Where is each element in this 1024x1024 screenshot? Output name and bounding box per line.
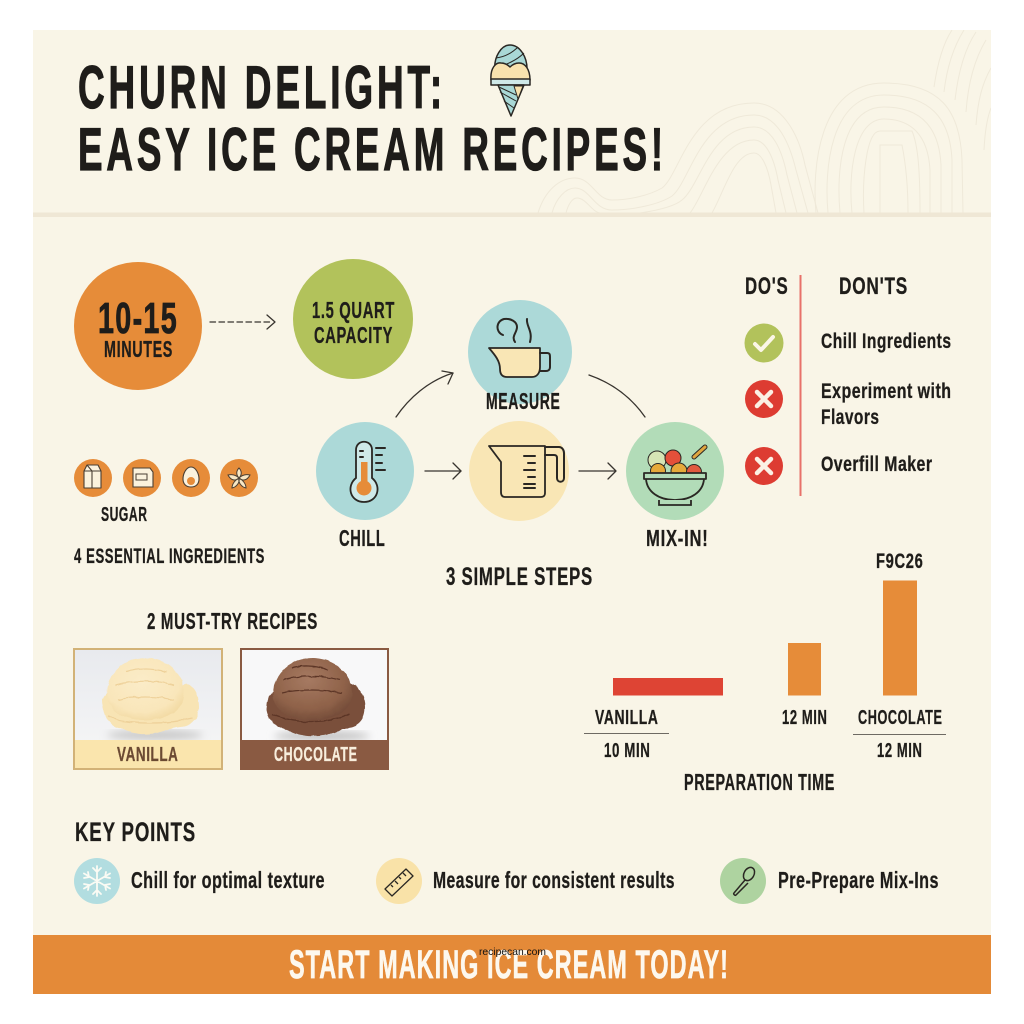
key point: mix-ins — [720, 858, 939, 904]
icon: egg — [172, 459, 210, 497]
footer banner: START MAKING ICE CREAM TODAY! — [289, 943, 729, 987]
footer banner — [33, 935, 991, 994]
key point: mix-ins: Pre-Prepare Mix-Ins — [778, 867, 939, 893]
panel: do's and don'ts: DO'S — [745, 273, 788, 300]
labels: chocolate — [853, 706, 946, 762]
icon: cross — [745, 447, 783, 485]
divider band — [33, 212, 991, 217]
arrow: dashed to capacity — [210, 315, 275, 329]
card: chocolate — [241, 649, 389, 769]
step: mix-in bowl — [626, 422, 724, 551]
axis title: PREPARATION TIME — [684, 769, 835, 795]
panel: do's and don'ts: Chill Ingredients — [821, 330, 952, 353]
card: vanilla — [74, 649, 222, 769]
key point: measure — [376, 858, 675, 904]
step: measure: MEASURE — [486, 388, 560, 414]
heading: 2 must-try recipes: 2 MUST-TRY RECIPES — [147, 608, 318, 634]
icon: sugar bag — [123, 459, 161, 497]
title — [78, 54, 667, 183]
header contour pattern — [538, 30, 991, 213]
card: vanilla: VANILLA — [117, 744, 178, 766]
icon: check — [744, 324, 784, 362]
key point: measure: Measure for consistent results — [433, 867, 675, 893]
icon: vanilla flower — [220, 459, 258, 497]
bar: vanilla — [613, 678, 723, 696]
panel: do's and don'ts: DON'TS — [839, 273, 908, 300]
heading: key points: KEY POINTS — [75, 817, 196, 847]
label: 12 min: 12 MIN — [782, 707, 828, 729]
labels: vanilla — [584, 706, 669, 762]
step: measuring cup — [469, 421, 569, 521]
arrow: cup to mix-in — [579, 463, 616, 479]
step: measure — [468, 300, 572, 414]
stat: 1.5 quart capacity — [293, 259, 413, 379]
arrow: chill to cup — [425, 463, 461, 479]
labels: chocolate: CHOCOLATE — [858, 706, 942, 729]
panel: do's and don'ts: Overfill Maker — [821, 453, 932, 476]
arrow: chill to measure — [396, 371, 453, 417]
chart: preparation time — [584, 550, 946, 795]
heading: 4 essential ingredients: 4 ESSENTIAL INGREDIENTS — [74, 545, 265, 568]
stat: 10-15 minutes — [74, 262, 202, 390]
stat: 1.5 quart capacity: CAPACITY — [314, 322, 393, 348]
label: sugar: SUGAR — [101, 504, 148, 526]
bar: middle — [788, 643, 821, 696]
labels: vanilla: 10 MIN — [604, 740, 650, 762]
label: F9C26: F9C26 — [876, 550, 924, 573]
icon: ice cream cone — [491, 45, 530, 116]
panel: do's and don'ts — [744, 273, 952, 496]
bar: chocolate — [883, 580, 917, 696]
ingredients group — [74, 459, 258, 497]
icon: milk carton — [74, 459, 112, 497]
heading: 3 simple steps: 3 SIMPLE STEPS — [446, 563, 593, 591]
panel: do's and don'ts: Experiment with — [821, 380, 952, 403]
labels: vanilla: VANILLA — [595, 706, 658, 729]
panel: do's and don'ts: Flavors — [821, 406, 880, 429]
title: EASY ICE CREAM RECIPES! — [78, 116, 667, 183]
labels: chocolate: 12 MIN — [877, 740, 922, 762]
card: chocolate: CHOCOLATE — [274, 744, 358, 766]
step: mix-in bowl: MIX-IN! — [646, 525, 708, 551]
icon: cross — [745, 380, 783, 418]
step: chill: CHILL — [339, 525, 386, 551]
key point: chill: Chill for optimal texture — [131, 867, 325, 893]
step: chill — [316, 422, 414, 551]
title: CHURN DELIGHT: — [78, 54, 446, 121]
arrow: measure to mix-in — [589, 375, 645, 417]
stat: 10-15 minutes: 10-15 — [98, 294, 178, 343]
stat: 1.5 quart capacity: 1.5 QUART — [312, 297, 395, 323]
key point: chill — [74, 858, 325, 904]
stat: 10-15 minutes: MINUTES — [104, 336, 173, 362]
watermark: recipecan.com — [479, 946, 546, 958]
